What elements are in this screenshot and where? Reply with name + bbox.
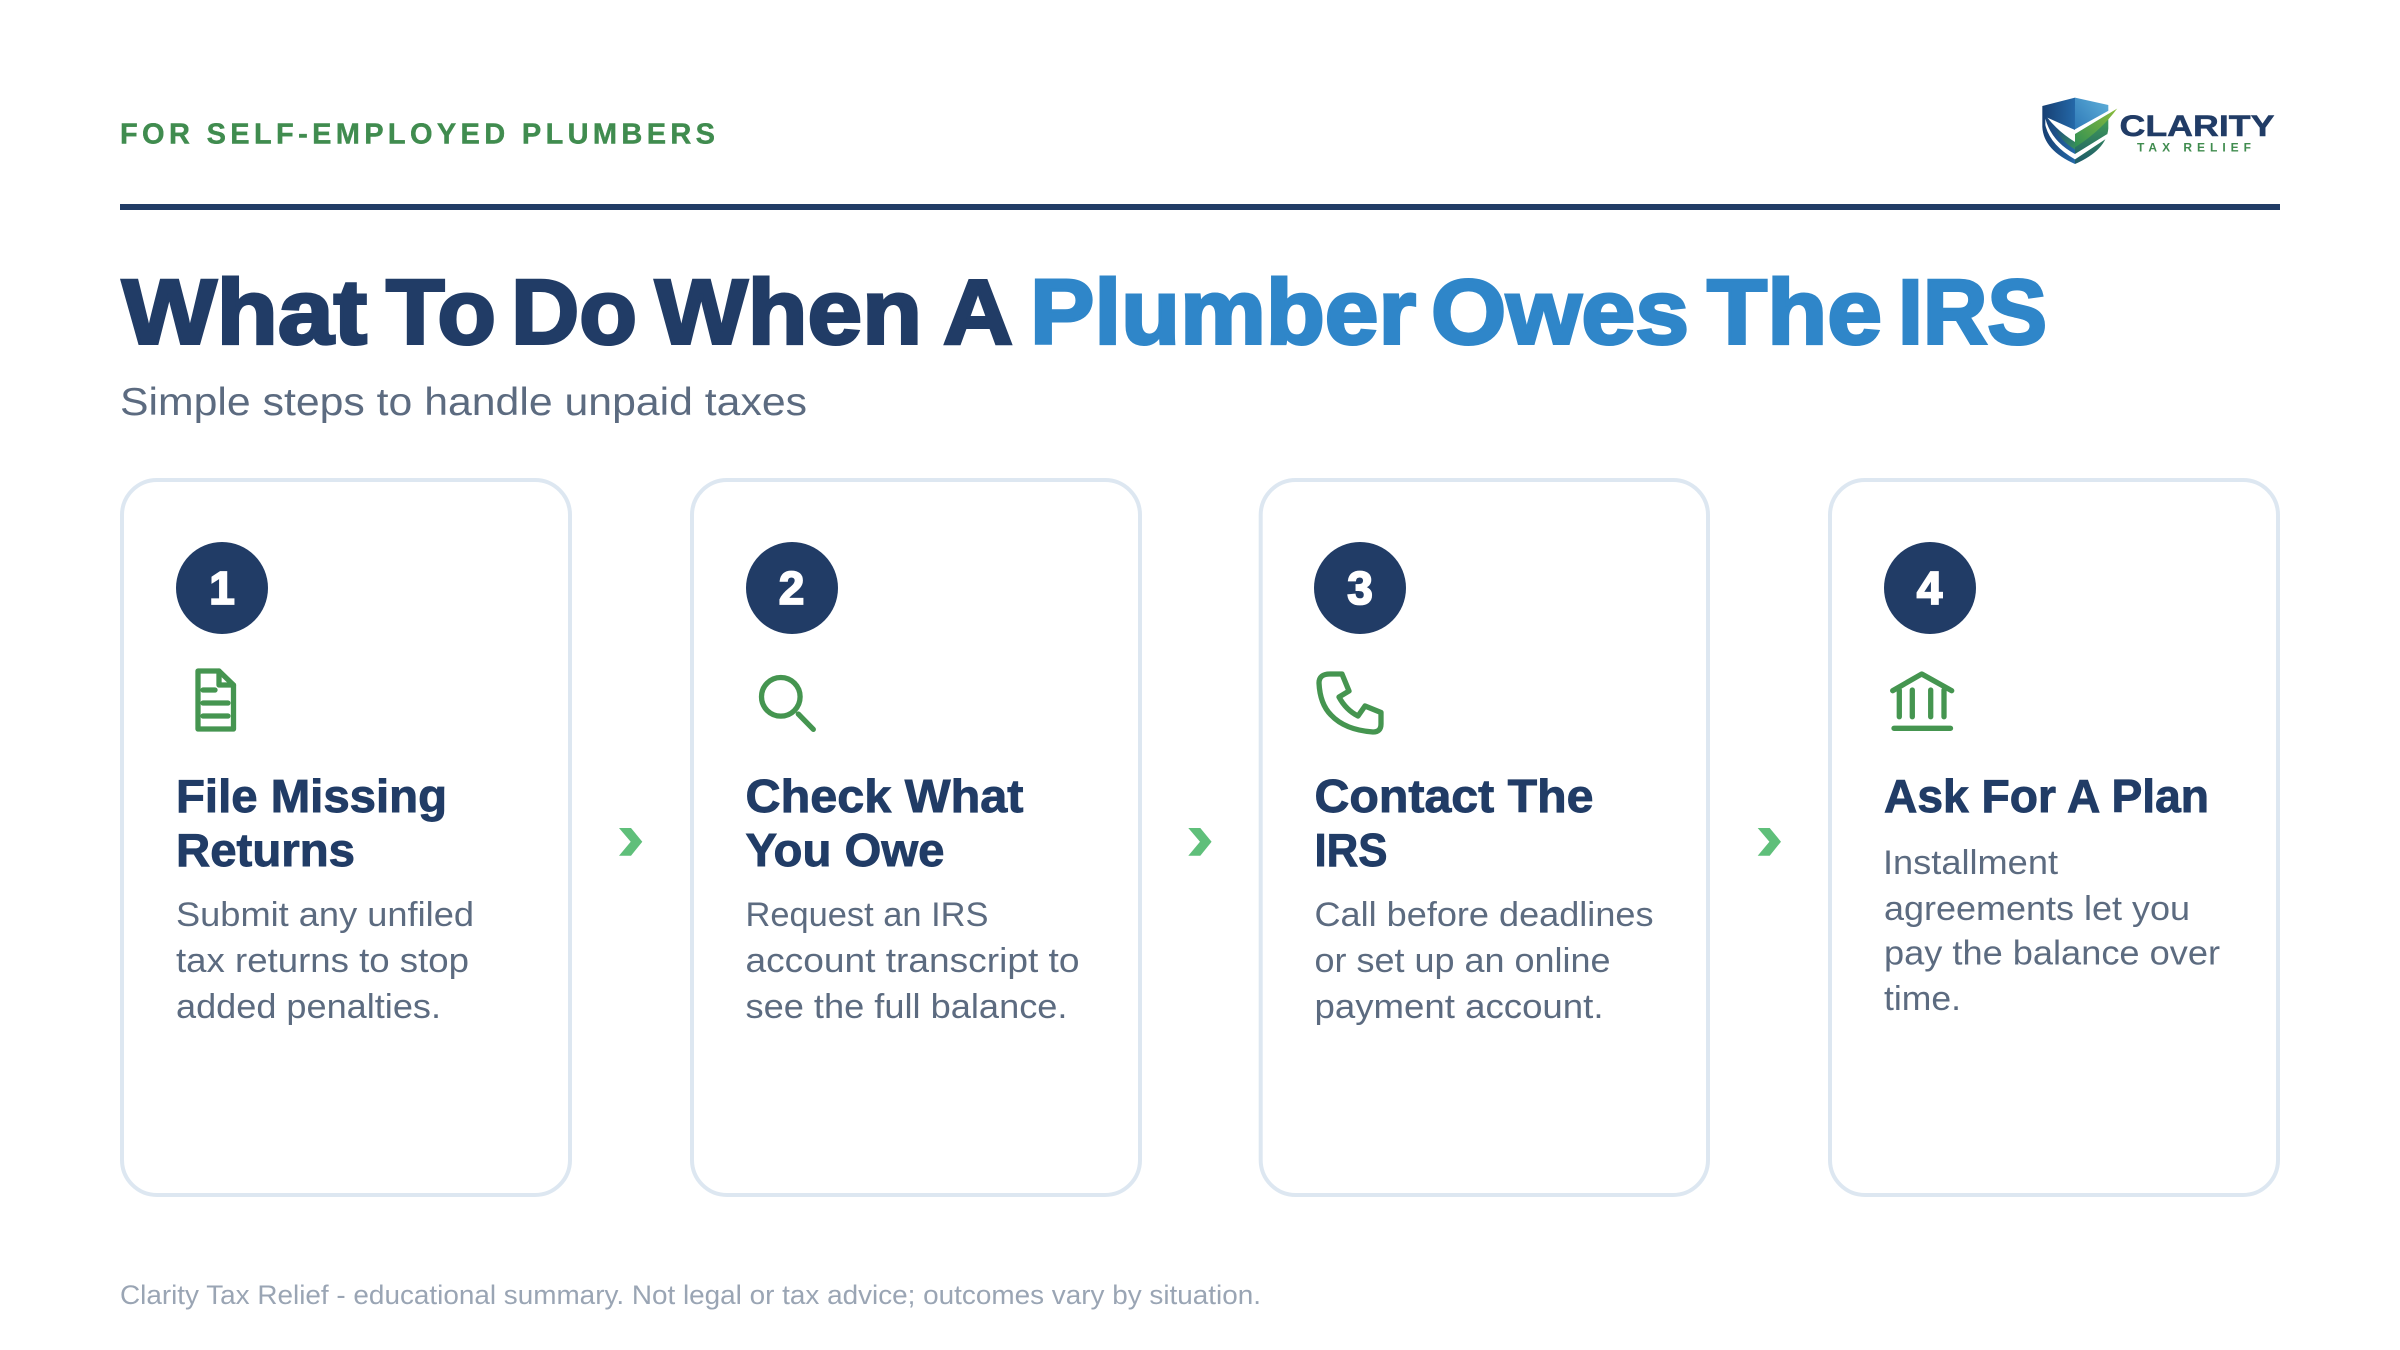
icon: shield with check bbox=[2042, 98, 2117, 164]
step description: tax returns to stop bbox=[176, 942, 469, 980]
step heading bbox=[746, 770, 1024, 876]
card outline bbox=[122, 480, 570, 1195]
title: dark part: What bbox=[122, 262, 367, 364]
title: dark part: Do bbox=[511, 262, 637, 364]
logo tagline: TAX RELIEF bbox=[2137, 141, 2251, 155]
panel: step 3 bbox=[1261, 480, 1708, 1195]
arrow 3 to 4 bbox=[1758, 828, 1781, 856]
step description: pay the balance over bbox=[1884, 934, 2220, 972]
step description: Installment bbox=[1883, 844, 2058, 882]
step number 2 bbox=[746, 542, 838, 634]
panel: step 4 bbox=[1830, 480, 2278, 1195]
step description bbox=[1883, 844, 2220, 1018]
arrow 1 to 2 bbox=[619, 828, 642, 856]
card outline bbox=[1261, 480, 1708, 1195]
step heading: You Owe bbox=[746, 824, 944, 876]
step description: added penalties. bbox=[176, 988, 441, 1026]
icon: phone bbox=[1319, 674, 1381, 732]
title: blue part: Owes bbox=[1431, 262, 1689, 364]
icon: document bbox=[198, 671, 234, 729]
step description: Request an IRS bbox=[746, 896, 988, 934]
step description bbox=[746, 896, 1080, 1026]
step heading: Check What bbox=[746, 770, 1024, 822]
step description bbox=[1314, 896, 1654, 1026]
icon: magnifier bbox=[762, 678, 813, 729]
title: dark part: A bbox=[943, 262, 1013, 364]
logo wordmark: CLARITY bbox=[2120, 110, 2274, 143]
step number 3: 3 bbox=[1347, 562, 1373, 614]
title: blue part: IRS bbox=[1898, 262, 2047, 364]
header rule bbox=[120, 204, 2280, 210]
subtitle: Simple steps to handle unpaid taxes bbox=[120, 381, 807, 424]
step heading bbox=[176, 770, 447, 876]
arrow 2 to 3 bbox=[1188, 828, 1212, 856]
step description: time. bbox=[1884, 980, 1961, 1018]
step number 2: 2 bbox=[779, 562, 804, 614]
title: blue part bbox=[1030, 262, 2047, 364]
title bbox=[122, 262, 2047, 364]
step heading: Ask For A Plan bbox=[1884, 770, 2209, 822]
step description: payment account. bbox=[1314, 988, 1604, 1026]
step description: account transcript to bbox=[746, 942, 1080, 980]
step description: agreements let you bbox=[1884, 890, 2190, 928]
panel: step 1 bbox=[122, 480, 570, 1195]
title: blue part: The bbox=[1707, 262, 1882, 364]
step number 1: 1 bbox=[209, 562, 235, 614]
card outline bbox=[692, 480, 1140, 1195]
logo: Clarity Tax Relief bbox=[2042, 98, 2274, 164]
title: dark part: When bbox=[655, 262, 922, 364]
step description: see the full balance. bbox=[746, 988, 1068, 1026]
title: blue part: Plumber bbox=[1030, 262, 1416, 364]
step description: Call before deadlines bbox=[1314, 896, 1654, 934]
title: dark part bbox=[122, 262, 1013, 364]
step heading: Contact The bbox=[1314, 770, 1594, 822]
card outline bbox=[1830, 480, 2278, 1195]
step heading: Returns bbox=[176, 824, 355, 876]
title: dark part: To bbox=[386, 262, 496, 364]
step heading: IRS bbox=[1314, 824, 1388, 876]
step description: or set up an online bbox=[1314, 942, 1610, 980]
step heading: File Missing bbox=[176, 770, 447, 822]
footer disclaimer: Clarity Tax Relief - educational summary. Not legal or tax advice; outcomes vary by situation. bbox=[120, 1280, 1261, 1310]
step number 4 bbox=[1884, 542, 1976, 634]
step number 4: 4 bbox=[1917, 562, 1943, 614]
step heading bbox=[1314, 770, 1594, 876]
eyebrow: audience label: FOR SELF-EMPLOYED PLUMBERS bbox=[120, 118, 715, 150]
step number 1 bbox=[176, 542, 268, 634]
step description bbox=[176, 896, 474, 1026]
icon: bank bbox=[1893, 674, 1952, 728]
step description: Submit any unfiled bbox=[176, 896, 474, 934]
step number 3 bbox=[1314, 542, 1406, 634]
panel: step 2 bbox=[692, 480, 1140, 1195]
